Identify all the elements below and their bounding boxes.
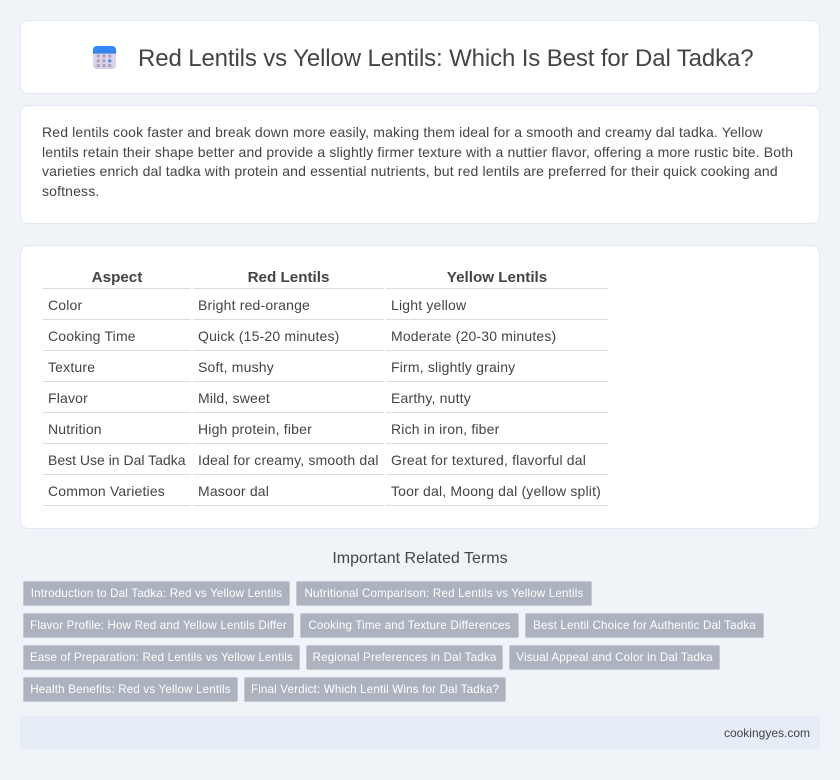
related terms heading: Important Related Terms xyxy=(332,550,508,567)
table card xyxy=(20,245,820,529)
title: Red Lentils vs Yellow Lentils: Which Is Best for Dal Tadka? xyxy=(138,45,753,72)
comparison table: Great for textured, flavorful dal xyxy=(391,452,586,468)
intro paragraph: softness. xyxy=(42,183,99,199)
intro paragraph: lentils retain their shape better and provide a slightly firmer texture with a nuttier flavor, offering a more rustic bite. Both xyxy=(42,144,793,160)
related term tags: Nutritional Comparison: Red Lentils vs Yellow Lentils xyxy=(304,587,584,600)
comparison table: Masoor dal xyxy=(198,483,269,499)
comparison table: Rich in iron, fiber xyxy=(391,421,499,437)
comparison table: Color xyxy=(48,297,82,313)
related term tags: Flavor Profile: How Red and Yellow Lentils Differ xyxy=(30,619,287,632)
related term tags: Final Verdict: Which Lentil Wins for Dal Tadka? xyxy=(251,683,499,696)
comparison table: Moderate (20-30 minutes) xyxy=(391,328,556,344)
comparison table: Firm, slightly grainy xyxy=(391,359,515,375)
comparison table: Red Lentils xyxy=(248,269,329,286)
related term tags: Introduction to Dal Tadka: Red vs Yellow Lentils xyxy=(31,587,282,600)
comparison table: Cooking Time xyxy=(48,328,136,344)
comparison table: Nutrition xyxy=(48,421,102,437)
related term tags: Visual Appeal and Color in Dal Tadka xyxy=(516,651,713,664)
footer bar xyxy=(20,716,820,750)
intro text card xyxy=(20,105,820,224)
comparison table: High protein, fiber xyxy=(198,421,312,437)
title card xyxy=(20,20,820,94)
comparison table: Toor dal, Moong dal (yellow split) xyxy=(391,483,601,499)
comparison table: Texture xyxy=(48,359,95,375)
comparison table: Mild, sweet xyxy=(198,390,270,406)
related term tags: Ease of Preparation: Red Lentils vs Yellow Lentils xyxy=(30,651,293,664)
comparison table: Ideal for creamy, smooth dal xyxy=(198,452,379,468)
comparison table: Bright red-orange xyxy=(198,297,310,313)
related term tags xyxy=(23,581,764,702)
related term tags: Cooking Time and Texture Differences xyxy=(308,619,511,632)
comparison table: Light yellow xyxy=(391,297,466,313)
intro paragraph xyxy=(42,124,793,199)
comparison table: Soft, mushy xyxy=(198,359,274,375)
comparison table xyxy=(43,269,608,506)
related term tags: Health Benefits: Red vs Yellow Lentils xyxy=(30,683,231,696)
comparison table: Flavor xyxy=(48,390,88,406)
icon: calendar xyxy=(92,46,116,69)
comparison table: Aspect xyxy=(92,269,142,286)
comparison table: Common Varieties xyxy=(48,483,165,499)
intro paragraph: varieties enrich dal tadka with protein and essential nutrients, but red lentils are preferred for their quick cooking and xyxy=(42,163,778,179)
intro paragraph: Red lentils cook faster and break down more easily, making them ideal for a smooth and creamy dal tadka. Yellow xyxy=(42,124,763,140)
comparison table: Best Use in Dal Tadka xyxy=(48,452,185,468)
comparison table: Quick (15-20 minutes) xyxy=(198,328,340,344)
related term tags: Regional Preferences in Dal Tadka xyxy=(313,651,496,664)
footer source: cookingyes.com xyxy=(724,726,810,740)
related term tags: Best Lentil Choice for Authentic Dal Tadka xyxy=(533,619,756,632)
comparison table: Yellow Lentils xyxy=(447,269,547,286)
comparison table: Earthy, nutty xyxy=(391,390,471,406)
